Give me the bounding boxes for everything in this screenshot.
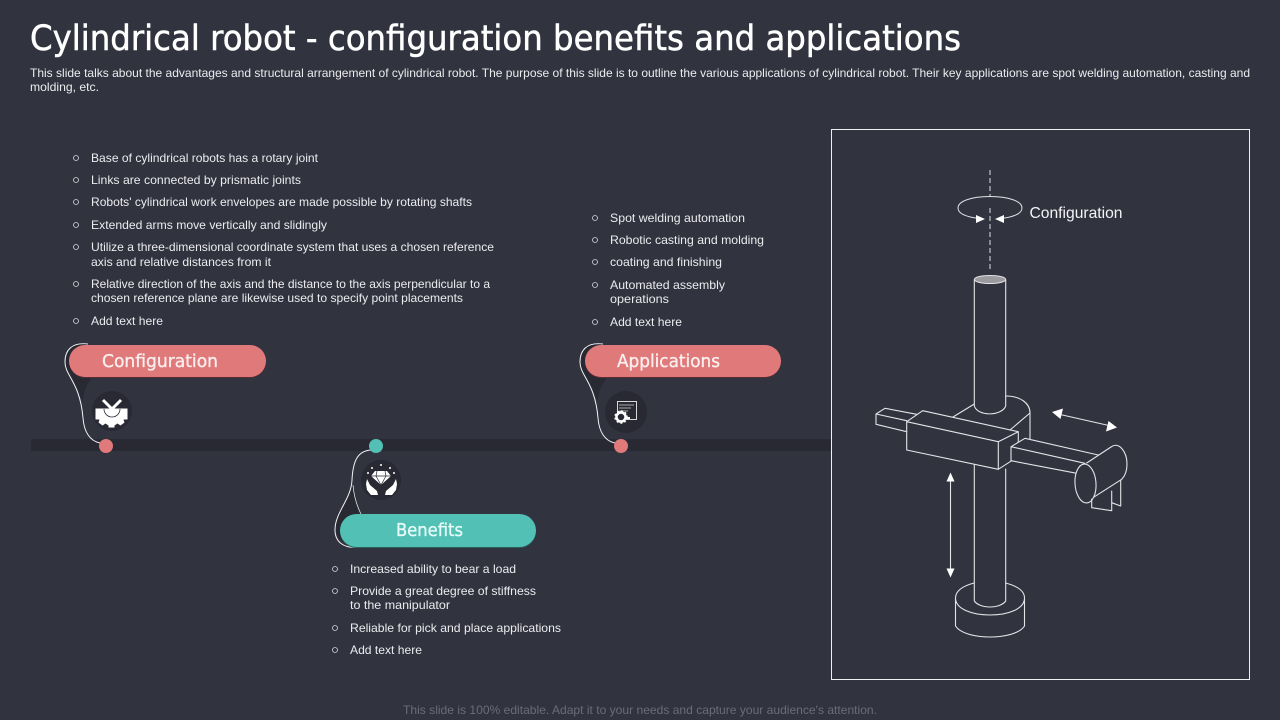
- benefits bullet list: [332, 562, 561, 657]
- benefits bullet list: Provide a great degree of stiffness: [350, 584, 536, 598]
- configuration pill: Configuration: [102, 351, 218, 372]
- benefits milestone: [335, 439, 536, 548]
- applications bullet list: Spot welding automation: [610, 211, 745, 225]
- benefits pill: Benefits: [396, 520, 463, 541]
- panel: robot diagram: [832, 130, 1250, 680]
- arrow: vertical motion: [946, 472, 954, 578]
- benefits bullet list: to the manipulator: [350, 598, 450, 612]
- benefits bullet list: Add text here: [350, 643, 422, 657]
- rotation axis and arrows: [958, 170, 1022, 270]
- icon: screen with gear: [605, 391, 647, 433]
- left arm: [876, 408, 917, 432]
- footer note: This slide is 100% editable. Adapt it to your needs and capture your audience's attention.: [403, 703, 877, 717]
- subtitle description: molding, etc.: [30, 80, 99, 94]
- applications bullet list: [592, 211, 764, 329]
- configuration bullet list: Add text here: [91, 314, 163, 328]
- slider block: [907, 411, 1018, 469]
- upper column: [974, 276, 1006, 414]
- benefits bullet list: Reliable for pick and place applications: [350, 621, 561, 635]
- subtitle description: This slide talks about the advantages and structural arrangement of cylindrical robot. The purpose of this slide is to outline the various applications of cylindrical robot. Their key applications are spot welding automation, casting and: [30, 66, 1250, 80]
- benefits bullet list: Increased ability to bear a load: [350, 562, 516, 576]
- configuration label: Configuration: [1030, 205, 1122, 222]
- configuration bullet list: chosen reference plane are likewise used to specify point placements: [91, 291, 463, 305]
- lower column: [974, 465, 1006, 607]
- applications pill: [585, 345, 781, 378]
- configuration bullet list: Extended arms move vertically and slidingly: [91, 218, 327, 232]
- applications pill: Applications: [617, 351, 720, 372]
- configuration bullet list: Links are connected by prismatic joints: [91, 173, 301, 187]
- gripper cylinder: [1074, 445, 1127, 511]
- applications bullet list: coating and finishing: [610, 255, 722, 269]
- applications bullet list: operations: [610, 292, 669, 306]
- configuration pill: [69, 345, 266, 378]
- rotary base housing: [953, 396, 1030, 439]
- arrow: horizontal motion: [1052, 408, 1117, 432]
- configuration bullet list: [74, 151, 494, 328]
- applications milestone: [580, 344, 781, 453]
- dot: benefits: [369, 439, 383, 453]
- configuration milestone: [65, 344, 266, 453]
- icon: hands holding diamond: [361, 460, 401, 500]
- applications bullet list: Robotic casting and molding: [610, 233, 764, 247]
- benefits pill: [340, 514, 536, 548]
- base cylinder: [956, 583, 1024, 637]
- configuration bullet list: Relative direction of the axis and the distance to the axis perpendicular to a: [91, 277, 490, 291]
- applications bullet list: Add text here: [610, 315, 682, 329]
- title: Cylindrical robot - configuration benefits and applications: [30, 19, 961, 59]
- applications bullet list: Automated assembly: [610, 278, 725, 292]
- icon: gear and wrench: [92, 391, 132, 431]
- configuration bullet list: Base of cylindrical robots has a rotary joint: [91, 151, 319, 165]
- configuration bullet list: Robots' cylindrical work envelopes are made possible by rotating shafts: [91, 195, 472, 209]
- configuration bullet list: axis and relative distances from it: [91, 255, 272, 269]
- dot: applications: [614, 439, 628, 453]
- right arm: [1011, 438, 1098, 473]
- dot: configuration: [99, 439, 113, 453]
- configuration bullet list: Utilize a three-dimensional coordinate system that uses a chosen reference: [91, 240, 494, 254]
- timeline bar: [31, 439, 831, 451]
- subtitle description: [30, 66, 1250, 94]
